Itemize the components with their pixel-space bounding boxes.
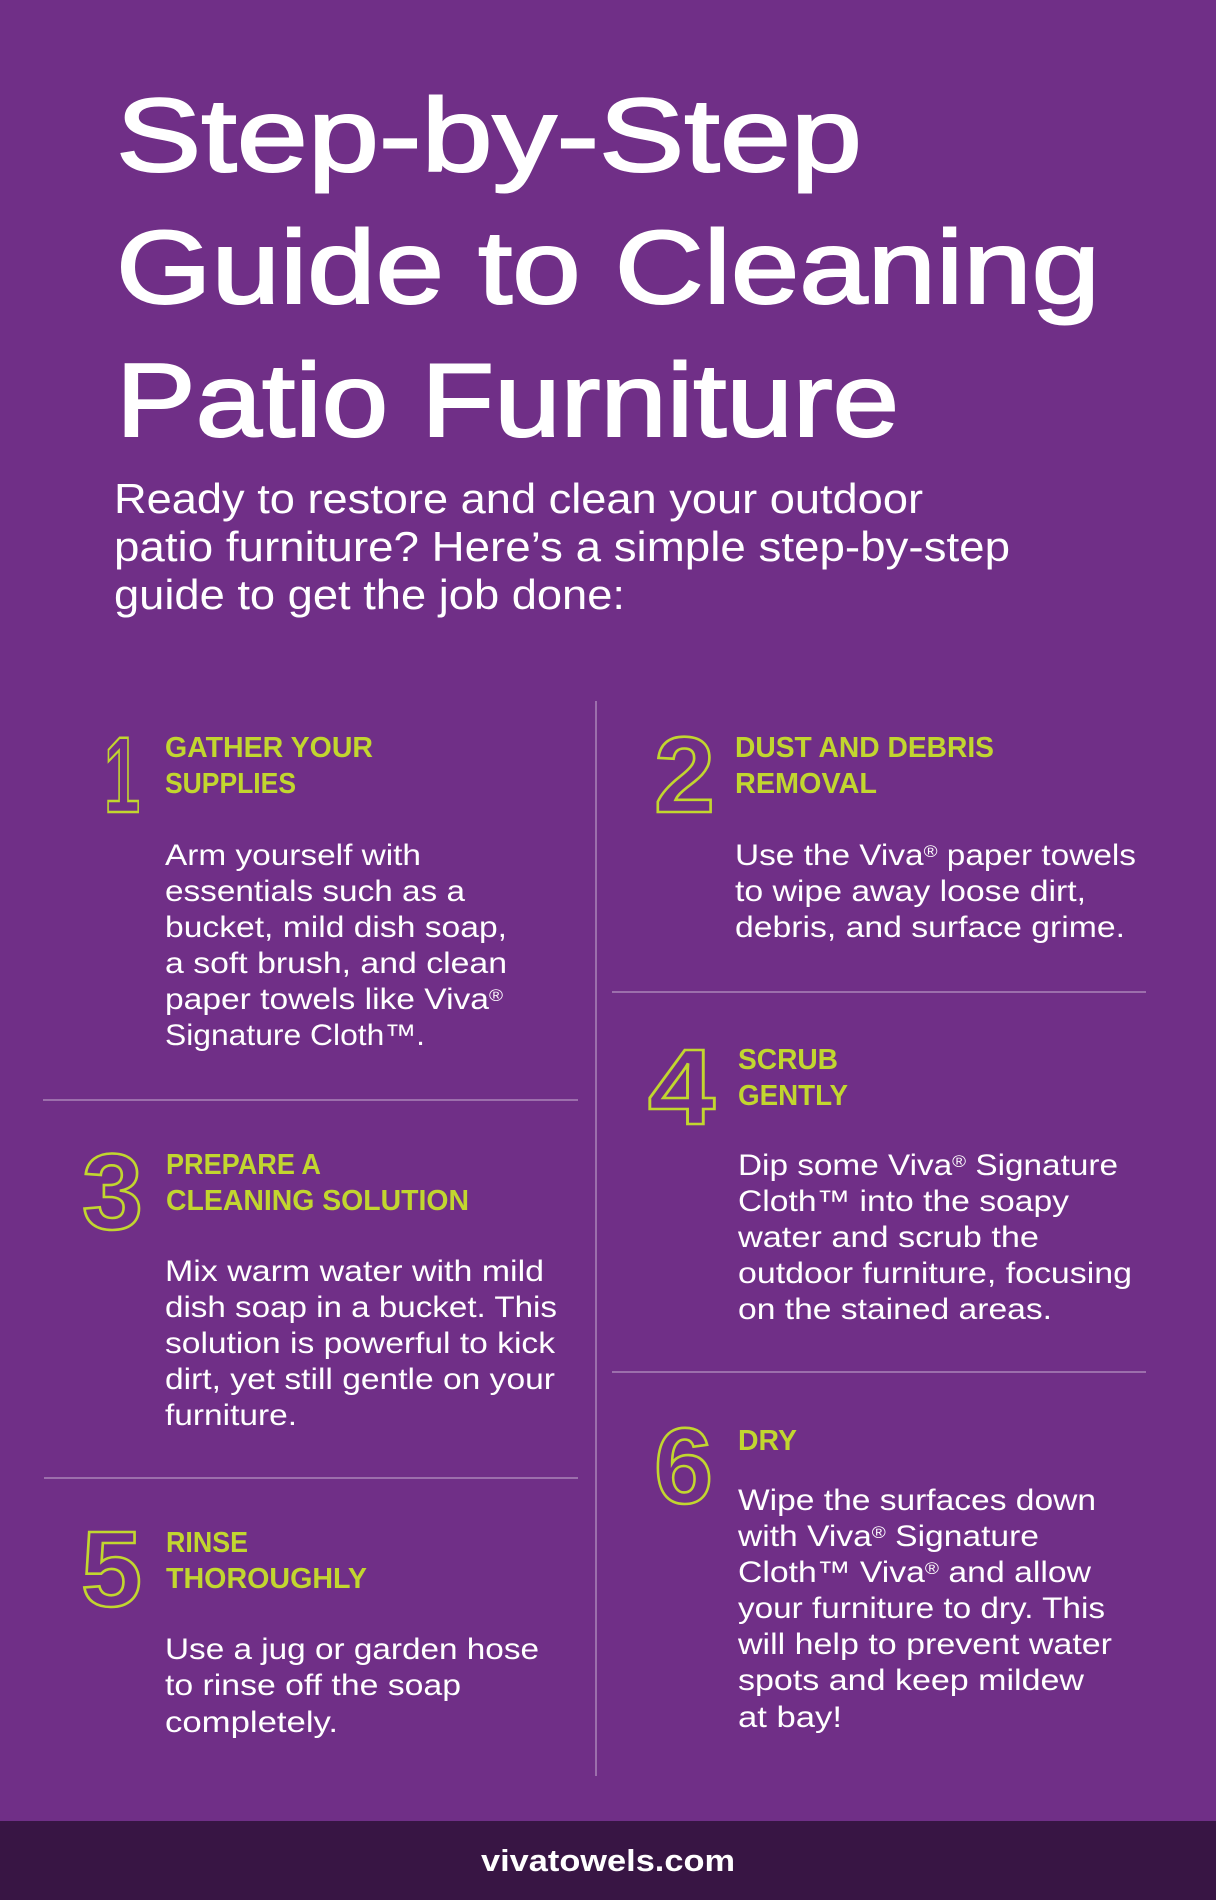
body: step 2: paper towels	[938, 839, 1136, 872]
title: Step-by-Step	[116, 78, 862, 194]
body: step 4: on the stained areas.	[738, 1293, 1052, 1326]
heading: step 5: THOROUGHLY	[166, 1563, 367, 1595]
numeral 2: 2	[654, 714, 715, 835]
body: step 4: Dip some Viva	[738, 1149, 931, 1182]
intro text: patio furniture? Here’s a simple step-by-step	[114, 523, 1010, 570]
heading: step 3	[166, 1149, 469, 1217]
body: step 1: ®	[489, 986, 504, 1005]
body: step 6: at bay!	[738, 1701, 842, 1734]
body: step 1: bucket, mild dish soap,	[165, 911, 507, 944]
body: step 5: to rinse off the soap	[165, 1669, 461, 1702]
body: step 4	[737, 1149, 1132, 1326]
body: step 5: Use a jug or garden hose	[165, 1633, 539, 1666]
body: step 6: Wipe the surfaces down	[738, 1484, 1096, 1517]
body: step 4: Signature	[966, 1149, 1118, 1182]
body: step 3: dirt, yet still gentle on your	[165, 1363, 555, 1396]
body: step 3: Mix warm water with mild	[165, 1255, 544, 1288]
body: step 1: Signature Cloth™.	[165, 1019, 425, 1052]
body: step 1: paper towels like Viva	[165, 983, 455, 1016]
heading: step 6: DRY	[738, 1425, 797, 1457]
numeral 5: 5	[81, 1508, 142, 1629]
panel: step 3 prepare a cleaning solution	[82, 1131, 557, 1432]
body: step 1: a soft brush, and clean	[165, 947, 507, 980]
heading: step 4: SCRUB	[738, 1044, 838, 1076]
body: step 6: and allow	[939, 1556, 1091, 1589]
body: step 6: ®	[925, 1559, 940, 1578]
title	[116, 78, 1100, 459]
intro text: Ready to restore and clean your outdoor	[114, 475, 923, 522]
body: step 3: dish soap in a bucket. This	[165, 1291, 557, 1324]
numeral 6: 6	[654, 1405, 713, 1526]
heading: step 5	[166, 1527, 367, 1595]
body: step 1: Arm yourself with	[165, 839, 421, 872]
body: step 6: Cloth™ Viva	[738, 1556, 904, 1589]
heading: step 3: PREPARE A	[166, 1149, 321, 1181]
panel: step 1 gather your supplies	[104, 714, 507, 1052]
body: step 2: Use the Viva	[735, 839, 905, 872]
body: step 2: to wipe away loose dirt,	[735, 875, 1086, 908]
heading: step 1	[165, 732, 373, 800]
panel: step 2 dust and debris removal	[654, 714, 1136, 944]
title: Guide to Cleaning	[116, 210, 1100, 326]
body: step 1: essentials such as a	[165, 875, 465, 908]
title: Patio Furniture	[116, 343, 899, 459]
footer	[0, 1821, 1216, 1900]
body: step 4: ®	[952, 1152, 967, 1171]
body: step 1	[165, 839, 507, 1052]
heading: step 1: GATHER YOUR	[165, 732, 373, 764]
body: step 4: outdoor furniture, focusing	[738, 1257, 1132, 1290]
panel: step 5 rinse thoroughly	[81, 1508, 539, 1739]
intro text	[114, 475, 1010, 618]
body: step 6: ®	[872, 1523, 886, 1542]
numeral 3: 3	[82, 1131, 143, 1252]
body: step 6: Signature	[886, 1520, 1039, 1553]
heading: step 5: RINSE	[166, 1527, 248, 1559]
body: step 3: furniture.	[165, 1399, 297, 1432]
body: step 2	[735, 839, 1136, 944]
body: step 4: water and scrub the	[737, 1221, 1039, 1254]
body: step 5	[165, 1633, 539, 1739]
heading: step 3: CLEANING SOLUTION	[166, 1185, 469, 1217]
heading: step 2	[735, 732, 994, 800]
panel: step 6 dry	[654, 1405, 1112, 1734]
body: step 6: spots and keep mildew	[738, 1664, 1084, 1697]
intro text: guide to get the job done:	[114, 571, 625, 618]
numeral 4: 4	[648, 1026, 715, 1147]
body: step 6: will help to prevent water	[737, 1628, 1112, 1661]
heading: step 1: SUPPLIES	[165, 768, 296, 800]
body: step 4: Cloth™ into the soapy	[738, 1185, 1069, 1218]
heading: step 4: GENTLY	[738, 1080, 848, 1112]
body: step 6	[737, 1484, 1112, 1734]
numeral 1: 1	[104, 714, 140, 835]
heading: step 2: DUST AND DEBRIS	[735, 732, 994, 764]
body: step 2: ®	[924, 842, 938, 861]
body: step 6: with Viva	[738, 1520, 858, 1553]
body: step 3: solution is powerful to kick	[165, 1327, 556, 1360]
body: step 2: debris, and surface grime.	[735, 911, 1125, 944]
panel: step 4 scrub gently	[648, 1026, 1132, 1326]
body: step 3	[165, 1255, 557, 1432]
heading: step 2: REMOVAL	[735, 768, 877, 800]
footer: vivatowels.com	[481, 1843, 735, 1878]
body: step 6: your furniture to dry. This	[738, 1592, 1105, 1625]
heading: step 4	[738, 1044, 848, 1112]
body: step 5: completely.	[165, 1706, 338, 1739]
